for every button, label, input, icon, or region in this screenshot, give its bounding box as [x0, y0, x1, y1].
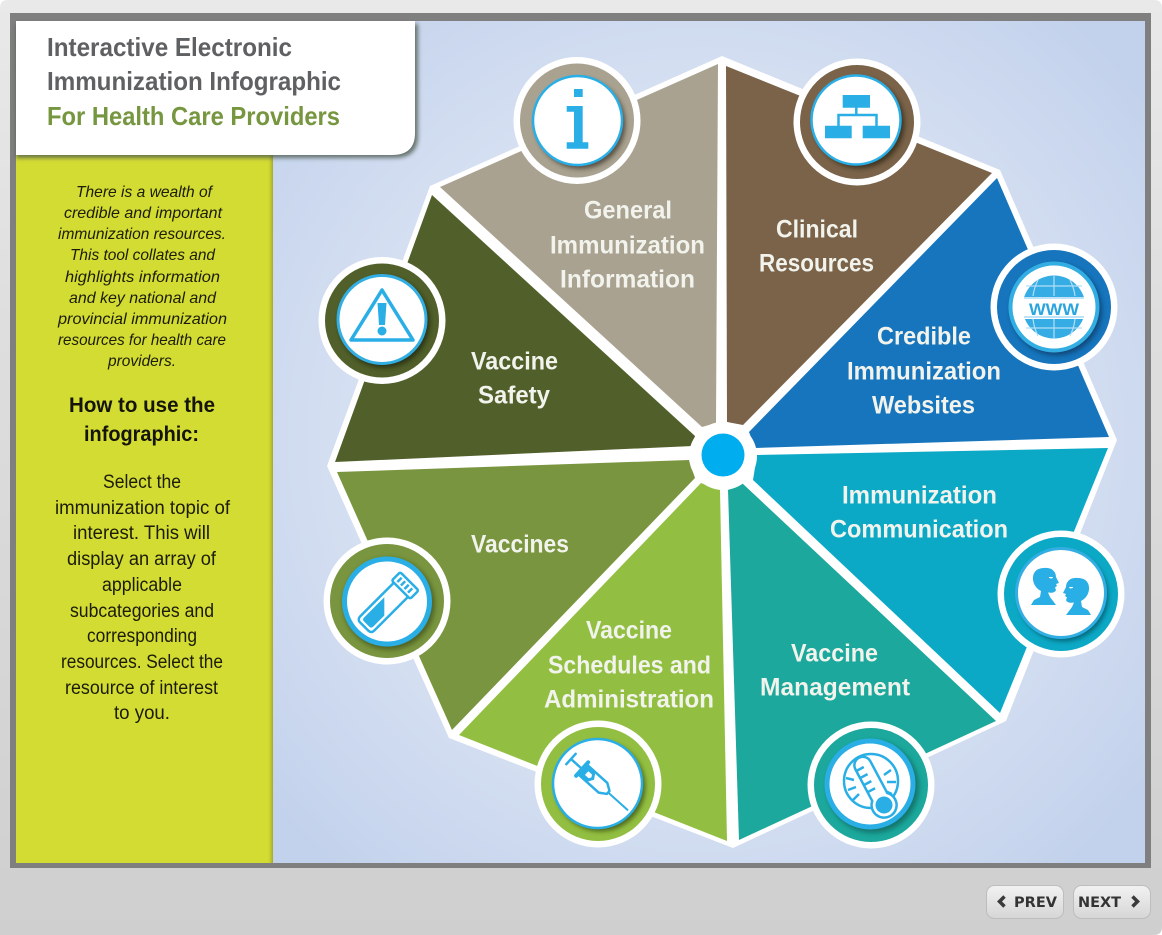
- instructions text: resource of interest: [65, 678, 219, 699]
- instructions text: immunization topic of: [55, 498, 231, 519]
- button: prev: PREV: [1014, 895, 1057, 911]
- label: Immunization Communication: [830, 482, 1008, 544]
- icon: test tube vial: [324, 538, 450, 664]
- label: General Immunization Information: General: [584, 196, 672, 224]
- intro text: [57, 184, 227, 370]
- title text: [47, 32, 341, 131]
- panel: sidebar: [16, 150, 273, 863]
- label: Credible Immunization Websites: Immunization: [847, 358, 1001, 386]
- chevron right: [1132, 896, 1138, 906]
- icon: www globe: WWW: [1029, 300, 1080, 319]
- wedge: Vaccines: [337, 460, 695, 730]
- instructions text: corresponding: [87, 626, 197, 647]
- label: Vaccine Schedules and Administration: Schedules and: [548, 652, 711, 680]
- chevron left: [1000, 896, 1004, 906]
- instructions text: display an array of: [67, 549, 217, 570]
- instructions text: [55, 472, 231, 724]
- label: Credible Immunization Websites: Credible: [877, 322, 971, 350]
- icon: thermometer over germ: [808, 722, 934, 848]
- intro text: There is a wealth of: [76, 184, 214, 201]
- label: Credible Immunization Websites: [847, 322, 1001, 420]
- title text: For Health Care Providers: [47, 101, 340, 131]
- wedge: Vaccine Safety: [335, 195, 695, 462]
- label: Clinical Resources: [759, 216, 874, 278]
- instructions text: subcategories and: [70, 601, 214, 622]
- label: Vaccines: Vaccines: [471, 530, 569, 558]
- button: prev: [986, 886, 1064, 918]
- instructions text: applicable: [102, 575, 182, 596]
- wheel: [327, 56, 1117, 848]
- icon: warning triangle: [318, 257, 446, 384]
- how to use heading: How to use the: [69, 394, 215, 417]
- intro text: highlights information: [65, 269, 220, 286]
- label: Vaccine Management: Vaccine: [791, 640, 878, 668]
- label: General Immunization Information: Immunization: [550, 232, 705, 260]
- icon: information: [514, 57, 640, 184]
- intro text: immunization resources.: [58, 226, 226, 243]
- label: Clinical Resources: Resources: [759, 250, 874, 278]
- label: Credible Immunization Websites: Websites: [872, 392, 975, 420]
- intro text: resources for health care: [58, 332, 226, 349]
- label: General Immunization Information: Information: [560, 266, 695, 294]
- hub: [689, 422, 757, 490]
- label: Vaccine Management: Management: [760, 674, 911, 702]
- how to use heading: infographic:: [84, 423, 199, 446]
- label: Clinical Resources: Clinical: [776, 216, 858, 244]
- wedge: Credible Immunization Websites: [749, 178, 1109, 448]
- wedge: Clinical Resources: [726, 66, 992, 425]
- label: Vaccine Management: [760, 640, 911, 702]
- label: Vaccine Safety: [471, 348, 558, 410]
- instructions text: Select the: [103, 472, 181, 493]
- wheel white base: [327, 56, 1117, 848]
- icon: www globe: [990, 244, 1118, 370]
- icon: syringe: [534, 720, 662, 848]
- intro text: and key national and: [69, 290, 217, 307]
- how to use heading: [69, 394, 215, 446]
- label: Vaccine Safety: Safety: [478, 382, 550, 410]
- instructions text: resources. Select the: [61, 652, 223, 673]
- intro text: provincial immunization: [57, 311, 227, 328]
- label: General Immunization Information: [550, 196, 705, 294]
- intro text: credible and important: [64, 205, 223, 222]
- button: next: [1074, 886, 1150, 918]
- title block: [16, 21, 418, 158]
- wedge: Vaccine Management: [728, 483, 996, 840]
- wedge labels: [471, 196, 1008, 714]
- label: Vaccine Schedules and Administration: Administration: [544, 686, 714, 714]
- label: Immunization Communication: Communication: [830, 516, 1008, 544]
- label: Immunization Communication: Immunization: [842, 482, 997, 510]
- title text: Immunization Infographic: [47, 66, 341, 96]
- wedge: Immunization Communication: [753, 448, 1108, 713]
- label: Vaccine Safety: Vaccine: [471, 348, 558, 376]
- instructions text: to you.: [114, 703, 170, 724]
- label: Vaccine Schedules and Administration: [544, 616, 714, 714]
- intro text: This tool collates and: [70, 247, 216, 264]
- title text: Interactive Electronic: [47, 32, 292, 62]
- label: Vaccine Schedules and Administration: Vaccine: [586, 616, 672, 644]
- icon: two people talking: [998, 530, 1124, 658]
- intro text: providers.: [107, 353, 176, 370]
- instructions text: interest. This will: [73, 523, 210, 544]
- wedge: Vaccine Schedules and Administration: [459, 483, 727, 841]
- wedge: General Immunization Information: [440, 64, 718, 427]
- icon: organization chart: [794, 58, 920, 186]
- button: next: NEXT: [1078, 895, 1121, 911]
